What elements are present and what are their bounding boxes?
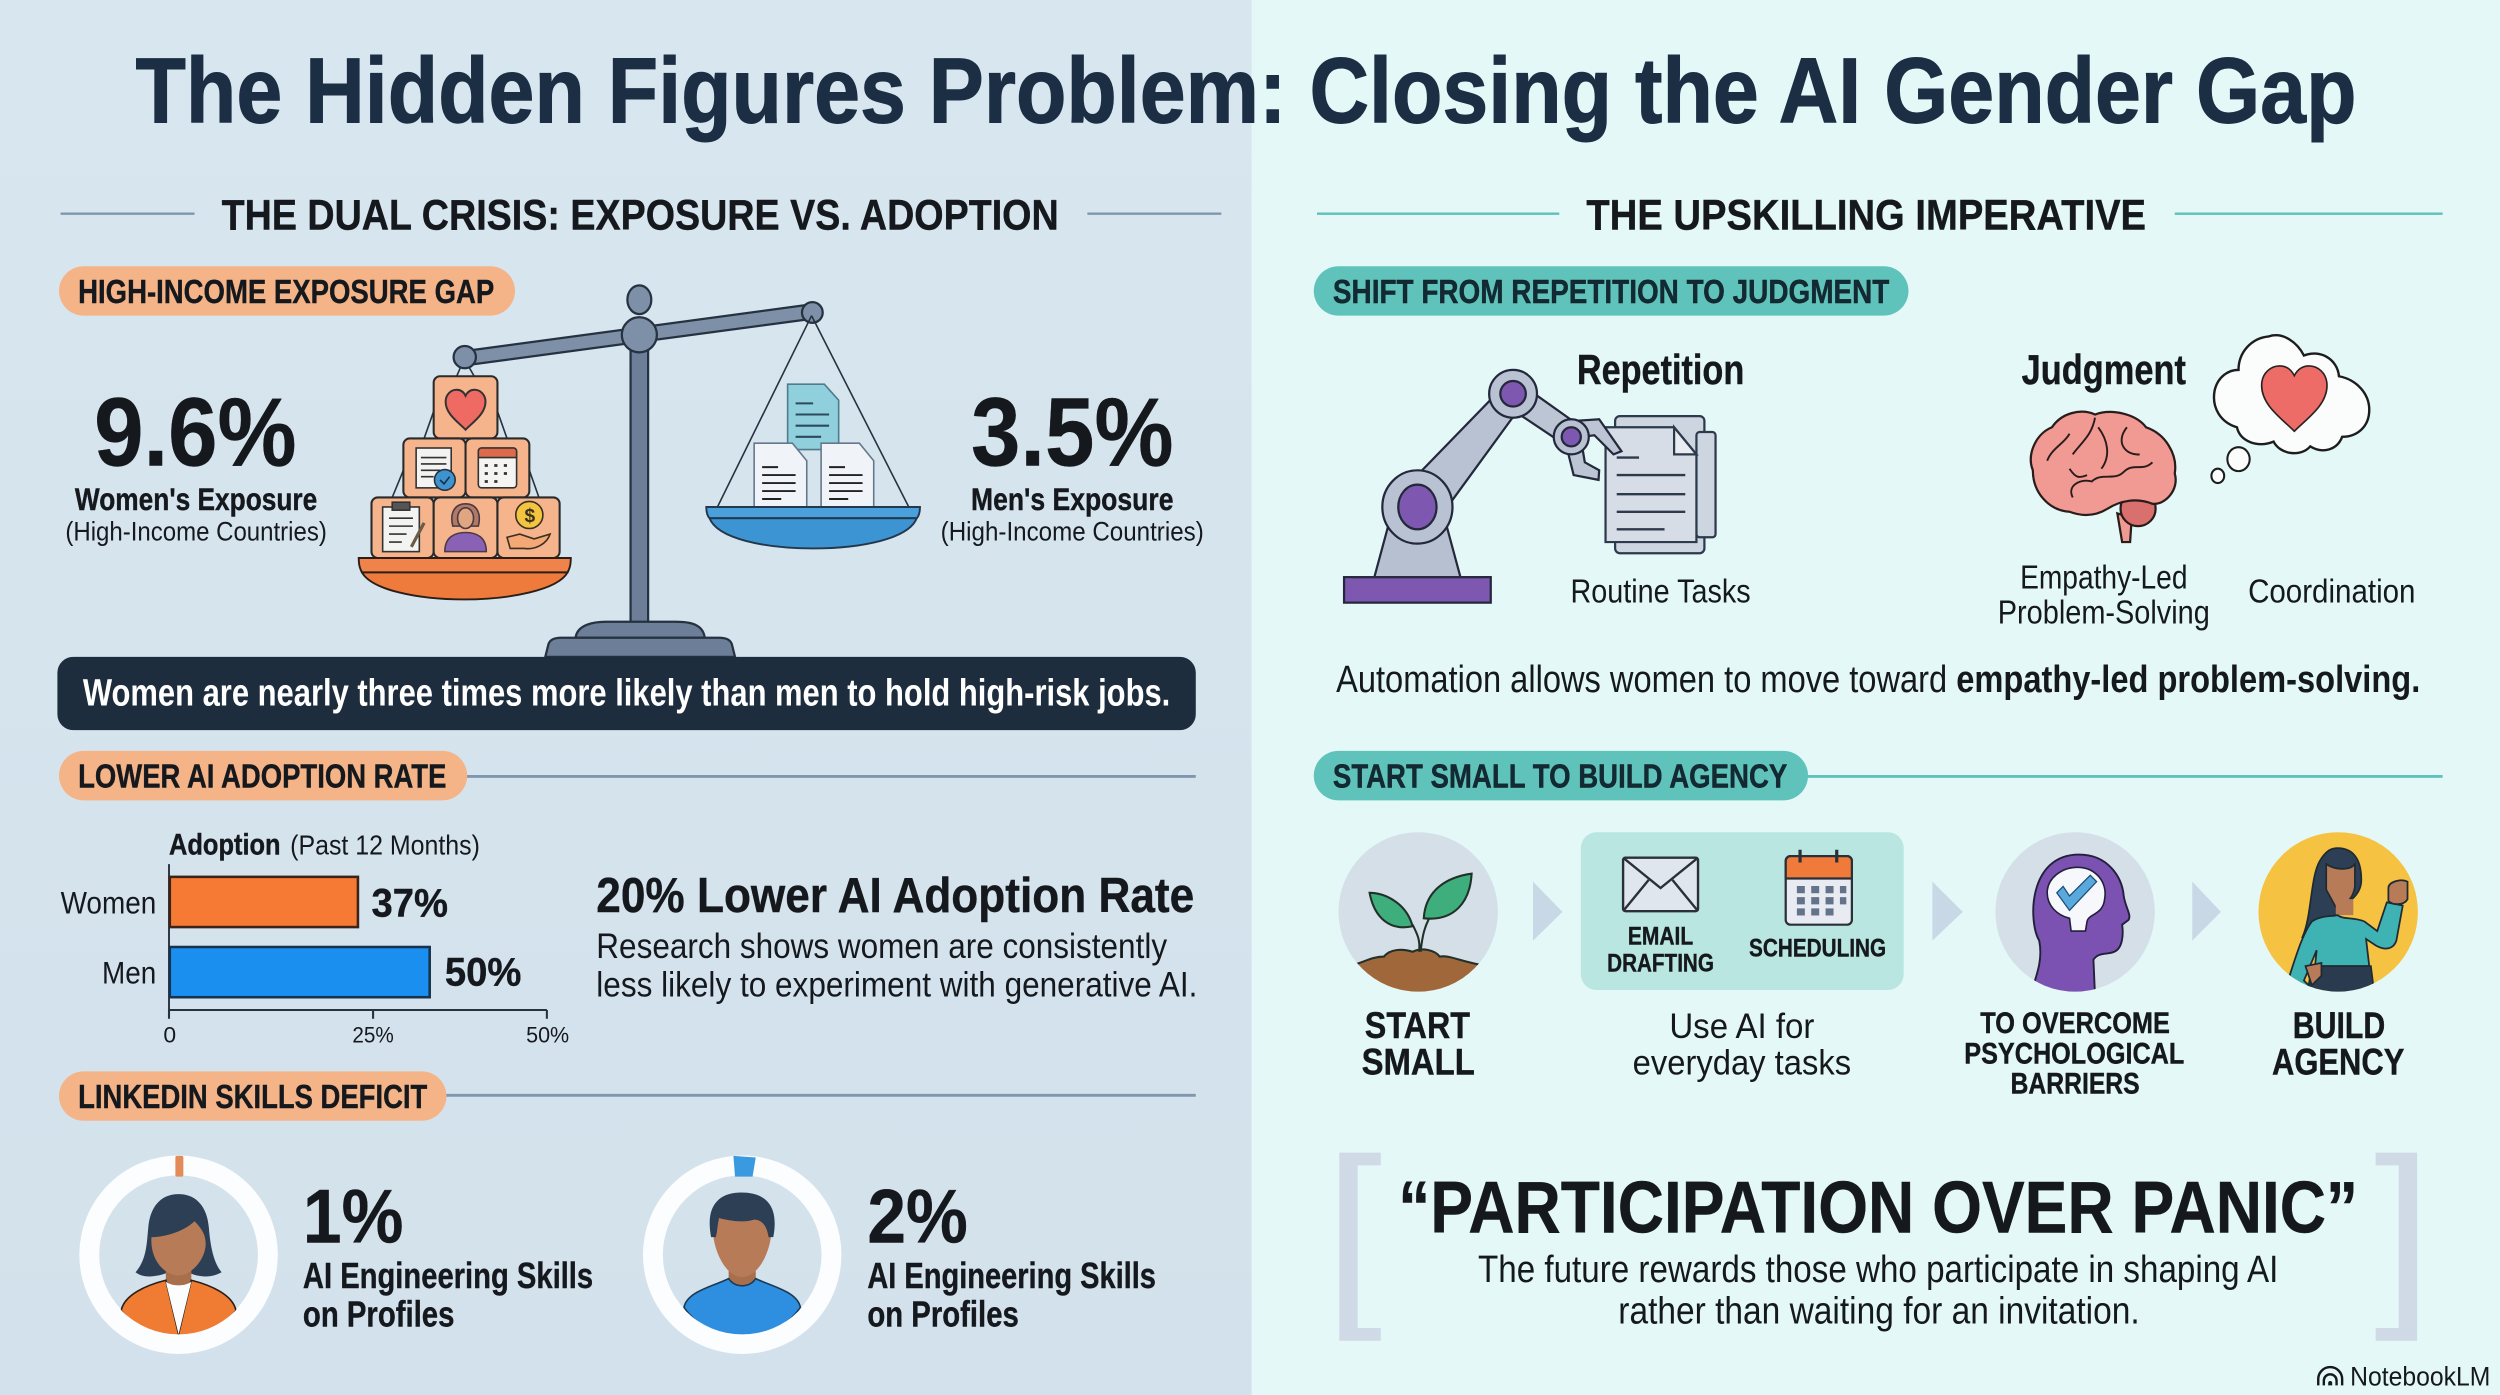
block icon: heart xyxy=(446,390,485,430)
orange pan xyxy=(359,558,571,599)
axis xyxy=(163,1010,569,1048)
block icon: person xyxy=(445,504,486,552)
stacked task blocks xyxy=(371,376,560,558)
callout banner xyxy=(57,657,1196,730)
icon: head with brain and check xyxy=(2030,855,2129,996)
pill: linkedin skills deficit xyxy=(59,1071,1196,1121)
step: use AI for everyday tasks: EMAIL xyxy=(1628,924,1693,951)
stat: men's exposure: (High-Income Countries) xyxy=(941,515,1204,546)
left section heading: THE DUAL CRISIS: EXPOSURE VS. ADOPTION xyxy=(222,192,1059,240)
step: start small: START xyxy=(1365,1005,1470,1046)
pill: linkedin skills deficit: LINKEDIN SKILLS DEFICIT xyxy=(78,1079,428,1116)
text block: 20% lower adoption: less likely to experiment with generative AI. xyxy=(596,965,1197,1004)
stat: women's exposure: Women's Exposure xyxy=(75,481,317,517)
step: overcome psychological barriers: TO OVERCOME xyxy=(1980,1007,2170,1040)
stat: men's exposure: Men's Exposure xyxy=(971,481,1173,517)
label: routine tasks: Routine Tasks xyxy=(1570,574,1751,611)
step: use AI for everyday tasks xyxy=(1581,832,1904,1083)
step: use AI for everyday tasks: everyday tasks xyxy=(1633,1044,1851,1083)
right section heading: THE UPSKILLING IMPERATIVE xyxy=(1586,192,2146,240)
stat: men's exposure: 3.5% xyxy=(971,378,1173,487)
stat: women 1% xyxy=(303,1175,593,1334)
block icon: calendar xyxy=(478,448,517,488)
right bracket xyxy=(2376,1153,2417,1341)
bar: men: 50% xyxy=(445,950,521,994)
callout: participation over panic: rather than waiting for an invitation. xyxy=(1618,1289,2140,1332)
icon: document stack xyxy=(1606,416,1716,553)
text block: automation: Automation allows women to move toward empathy-led problem-solving. xyxy=(1336,658,2420,701)
stat: women's exposure: (High-Income Countries) xyxy=(65,515,327,546)
bar: women: 37% xyxy=(371,882,448,926)
bar chart: adoption: (Past 12 Months) xyxy=(290,830,480,861)
bar: men: Men xyxy=(102,955,156,991)
heading: judgment: Judgment xyxy=(2022,346,2186,393)
watermark: NotebookLM: NotebookLM xyxy=(2350,1360,2490,1391)
bar chart: adoption xyxy=(61,829,569,1048)
pill: start small to build agency: START SMALL TO BUILD AGENCY xyxy=(1333,759,1787,796)
heading: repetition: Repetition xyxy=(1577,346,1744,393)
stat: women's exposure xyxy=(65,378,327,546)
pan strings xyxy=(392,316,910,510)
step: build agency xyxy=(2258,832,2418,1083)
left bracket xyxy=(1339,1153,1381,1341)
step: overcome psychological barriers xyxy=(1964,832,2184,1101)
icon: balance scale xyxy=(359,285,920,657)
pill: shift from repetition to judgment xyxy=(1314,266,1908,316)
block icon: clipboard xyxy=(383,502,424,552)
stat: men 2%: 2% xyxy=(867,1175,968,1260)
stat: men's exposure xyxy=(941,378,1204,546)
icon: sprout xyxy=(1356,872,1479,992)
pill: lower AI adoption rate xyxy=(59,751,1196,800)
icon: envelope xyxy=(1623,858,1698,911)
icon: calendar xyxy=(1786,850,1852,925)
pill: high-income exposure gap xyxy=(59,266,515,316)
axis: 50% xyxy=(526,1023,569,1048)
label: empathy-led problem-solving: Problem-Solving xyxy=(1998,594,2210,631)
label: empathy-led problem-solving: Empathy-Led xyxy=(2020,559,2187,596)
text block: 20% lower adoption: 20% Lower AI Adoption Rate xyxy=(596,868,1194,923)
arrow xyxy=(1533,882,1562,941)
stat: men 2%: on Profiles xyxy=(867,1294,1019,1334)
bar: women xyxy=(61,877,448,927)
block icon: document with check xyxy=(416,448,455,490)
step: start small xyxy=(1338,832,1498,1083)
text block: 20% lower adoption: Research shows women are consistently xyxy=(596,927,1168,966)
icon: robot arm xyxy=(1344,370,1621,603)
stat: women 1%: AI Engineering Skills xyxy=(303,1256,593,1296)
block icon: coin and hand: $ xyxy=(525,506,536,527)
blue document xyxy=(788,384,839,450)
bar chart: adoption: Adoption xyxy=(169,829,281,862)
callout: participation over panic: The future rewards those who participate in shaping AI xyxy=(1478,1248,2278,1291)
step: use AI for everyday tasks: SCHEDULING xyxy=(1749,936,1886,963)
avatar ring: woman xyxy=(89,1156,268,1344)
label: coordination: Coordination xyxy=(2248,574,2415,611)
axis: 0 xyxy=(163,1023,176,1048)
pill: shift from repetition to judgment: SHIFT FROM REPETITION TO JUDGMENT xyxy=(1333,274,1890,311)
text block: 20% lower adoption xyxy=(596,868,1197,1004)
avatar ring: man xyxy=(653,1156,831,1344)
scale pillar and beam xyxy=(454,285,823,657)
bar: women: Women xyxy=(61,885,156,921)
icon: confident woman xyxy=(2290,848,2408,1004)
stat: women's exposure: 9.6% xyxy=(94,378,297,487)
stat: women 1%: on Profiles xyxy=(303,1294,454,1334)
step: build agency: AGENCY xyxy=(2272,1042,2404,1083)
step: use AI for everyday tasks: Use AI for xyxy=(1669,1007,1815,1046)
block icon: coin and hand xyxy=(507,501,550,549)
stat: men 2%: AI Engineering Skills xyxy=(867,1256,1156,1296)
callout: participation over panic xyxy=(1339,1153,2417,1341)
pill: start small to build agency xyxy=(1314,751,2443,800)
pill: high-income exposure gap: HIGH-INCOME EXPOSURE GAP xyxy=(78,274,494,311)
blue pan xyxy=(706,507,920,548)
callout banner: Women are nearly three times more likely than men to hold high-risk jobs. xyxy=(83,671,1170,714)
step: overcome psychological barriers: PSYCHOLOGICAL xyxy=(1964,1037,2184,1070)
step: use AI for everyday tasks: DRAFTING xyxy=(1607,951,1714,978)
step: build agency: BUILD xyxy=(2293,1005,2385,1046)
icon: thought cloud with heart xyxy=(2211,335,2369,483)
step: overcome psychological barriers: BARRIERS xyxy=(2011,1068,2140,1101)
pill: lower AI adoption rate: LOWER AI ADOPTION RATE xyxy=(78,759,446,796)
step: start small: SMALL xyxy=(1362,1042,1475,1083)
arrow xyxy=(2192,882,2221,941)
label: empathy-led problem-solving xyxy=(1998,559,2210,631)
arrow xyxy=(1932,882,1963,941)
stat: women 1%: 1% xyxy=(303,1175,403,1260)
bar: men xyxy=(102,947,521,997)
icon: brain xyxy=(2031,412,2176,542)
callout: participation over panic: “PARTICIPATION OVER PANIC” xyxy=(1398,1166,2358,1248)
axis: 25% xyxy=(352,1023,394,1048)
stat: men 2% xyxy=(867,1175,1156,1334)
white documents xyxy=(754,443,874,507)
